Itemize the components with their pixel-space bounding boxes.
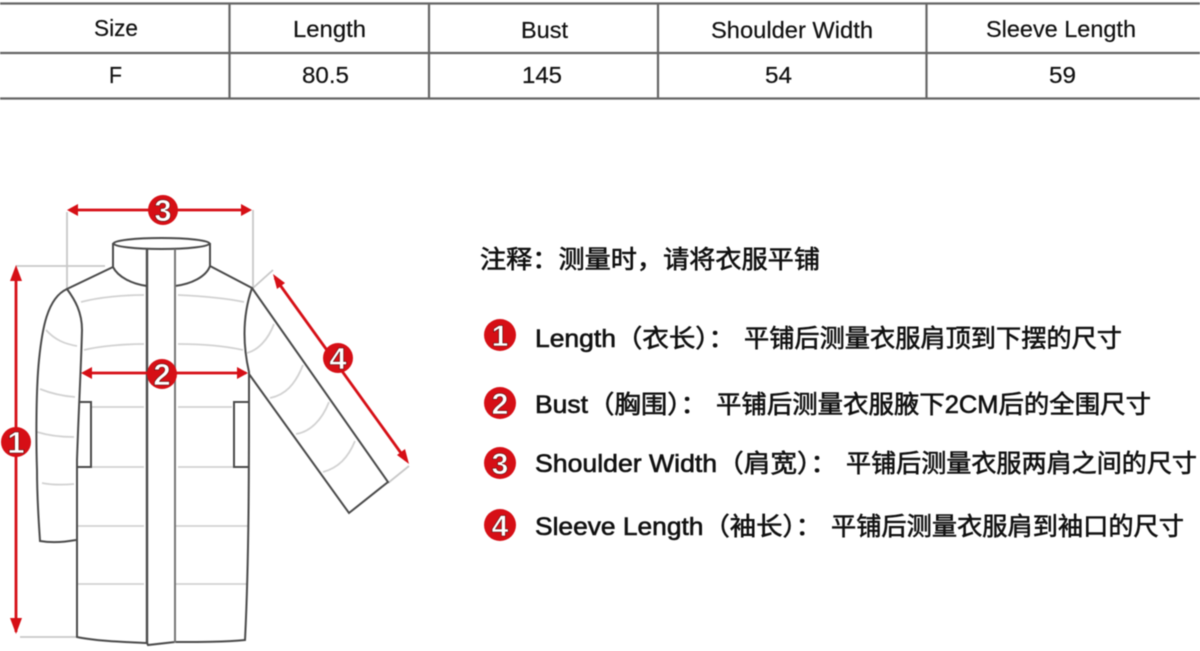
legend item 4: sleeve length xyxy=(484,509,1184,543)
value row: 145 xyxy=(522,62,562,88)
legend item 3: shoulder width: 3 xyxy=(492,448,508,481)
header row: Shoulder Width xyxy=(711,17,873,43)
legend item 2: bust: 平铺后测量衣服腋下2CM后的全围尺寸 xyxy=(716,391,1151,419)
jacket diagram xyxy=(1,193,409,645)
arrow 2: bust: 2 xyxy=(153,357,171,392)
arrow 4: sleeve length: 4 xyxy=(329,341,347,376)
arrow 4: sleeve length xyxy=(273,274,409,464)
table grid xyxy=(0,3,1200,99)
arrow 3: shoulder width xyxy=(67,193,252,228)
legend item 1: length: 1 xyxy=(492,320,508,353)
arrow 1: length: 1 xyxy=(7,425,25,460)
jacket right sleeve xyxy=(249,288,388,513)
jacket body outline xyxy=(67,249,252,645)
value row: F xyxy=(109,62,122,88)
header row: Bust xyxy=(521,17,568,43)
legend item 3: shoulder width xyxy=(484,447,1197,481)
legend item 2: bust: 2 xyxy=(492,388,508,421)
size table xyxy=(0,3,1200,99)
legend item 1: length: 平铺后测量衣服肩顶到下摆的尺寸 xyxy=(744,325,1122,353)
header row xyxy=(94,15,1136,43)
header row: Length xyxy=(293,16,366,42)
arrow 3: shoulder width: 3 xyxy=(154,193,172,228)
extension guide lines xyxy=(16,210,409,637)
legend item 4: sleeve length: 4 xyxy=(492,510,509,543)
jacket collar xyxy=(113,238,210,286)
note heading: 注释：测量时，请将衣服平铺 xyxy=(480,246,820,274)
value row: 59 xyxy=(1049,62,1076,88)
value row xyxy=(109,62,1076,88)
legend item 1: length xyxy=(484,319,1122,353)
legend item 1: length: Length（衣长）： xyxy=(535,325,735,353)
legend item 2: bust xyxy=(484,387,1151,421)
jacket pockets xyxy=(77,402,249,467)
legend item 3: shoulder width: 平铺后测量衣服两肩之间的尺寸 xyxy=(846,450,1197,478)
arrow 1: length xyxy=(1,265,31,634)
arrow 2: bust xyxy=(81,357,248,392)
header row: Size xyxy=(94,15,138,41)
header row: Sleeve Length xyxy=(986,16,1136,42)
jacket left sleeve xyxy=(36,289,76,542)
value row: 54 xyxy=(765,62,792,88)
legend item 4: sleeve length: Sleeve Length（袖长）： xyxy=(535,513,822,541)
legend item 2: bust: Bust（胸围）： xyxy=(535,391,707,419)
legend item 4: sleeve length: 平铺后测量衣服肩到袖口的尺寸 xyxy=(831,513,1184,541)
jacket quilting lines xyxy=(37,295,355,584)
legend item 3: shoulder width: Shoulder Width（肩宽）： xyxy=(535,450,837,478)
value row: 80.5 xyxy=(302,62,349,88)
